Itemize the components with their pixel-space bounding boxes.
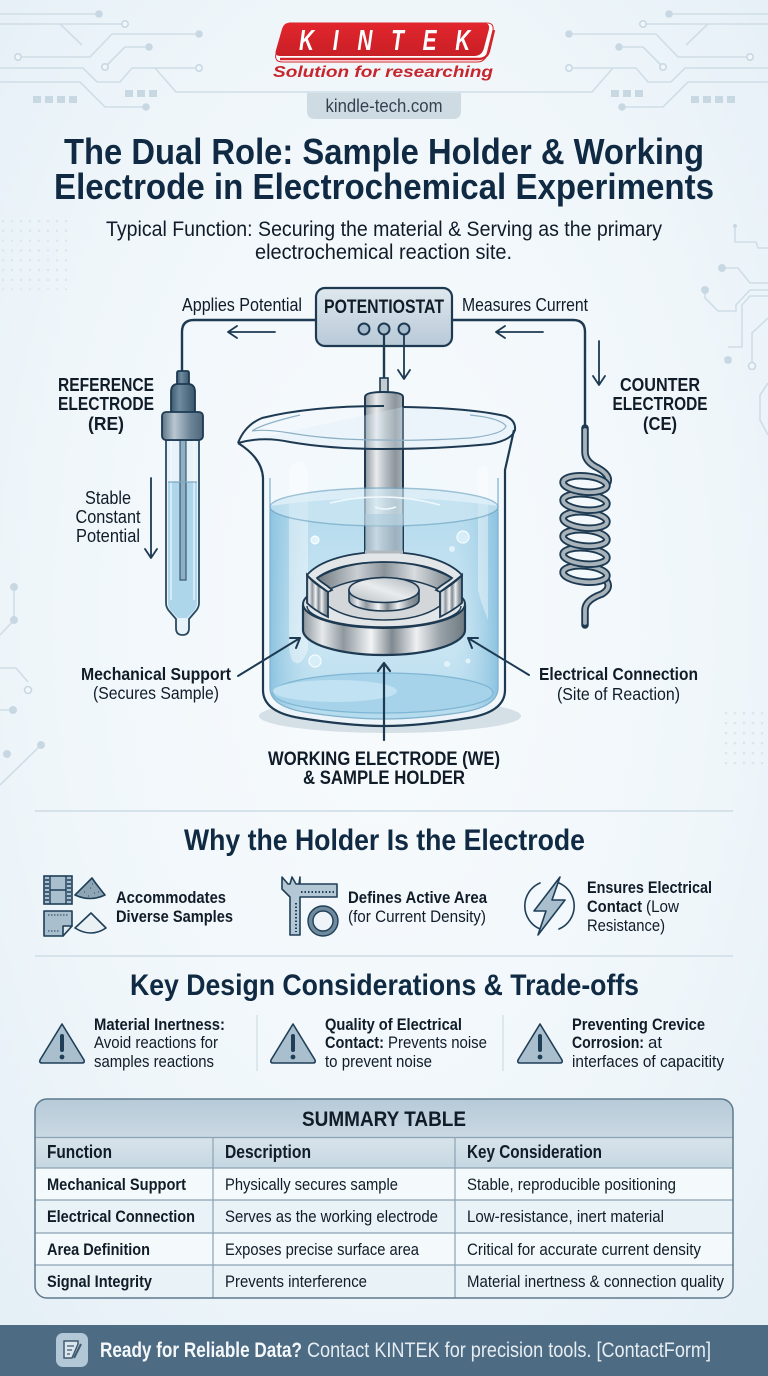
row: signal integrity: Material inertness & connection quality (467, 1272, 724, 1291)
icon: warning 2 (271, 1024, 315, 1063)
label: stable constant potential: Stable (85, 488, 131, 508)
icon: diverse samples (44, 876, 106, 936)
holder ring (307, 552, 462, 620)
website pill (307, 93, 461, 119)
text: ensures electrical contact: Resistance) (587, 917, 665, 935)
website pill: kindle-tech.com (326, 96, 442, 116)
footer banner (0, 1325, 768, 1376)
summary table (35, 1099, 733, 1298)
wire: working electrode (383, 335, 385, 378)
row: signal integrity: Prevents interference (225, 1272, 367, 1291)
label: reference electrode: ELECTRODE (58, 394, 154, 414)
call to action text: Ready for Reliable Data? (100, 1339, 302, 1362)
text: ensures electrical contact (587, 879, 712, 935)
row: mechanical support: Stable, reproducible positioning (467, 1175, 676, 1194)
icon: warning 3 (518, 1024, 562, 1063)
counter electrode coil (562, 428, 608, 625)
label: electrical connection: Electrical Connection (539, 664, 698, 684)
text: quality of electrical contact: Contact: (325, 1034, 384, 1052)
text: preventing crevice corrosion (572, 1016, 725, 1071)
label: electrical connection: (Site of Reaction) (557, 684, 680, 704)
subtitle: electrochemical reaction site. (255, 240, 512, 264)
title: Electrode in Electrochemical Experiments (54, 166, 714, 207)
icon: contact form (56, 1333, 88, 1367)
label: stable constant potential: Potential (76, 526, 140, 546)
row: signal integrity: Signal Integrity (47, 1272, 152, 1291)
label: working electrode: & SAMPLE HOLDER (303, 768, 465, 789)
logo: KINTEK (273, 23, 494, 81)
logo: KINTEK: Solution for researching (273, 64, 494, 81)
label: mechanical support (81, 664, 231, 703)
reference electrode (162, 371, 203, 635)
row: electrical connection (47, 1207, 664, 1226)
row: electrical connection: Serves as the working electrode (225, 1207, 438, 1226)
row: mechanical support: Mechanical Support (47, 1175, 186, 1194)
text: quality of electrical contact: Prevents noise (388, 1034, 487, 1052)
row: area definition: Area Definition (47, 1240, 150, 1259)
potentiostat box (316, 288, 452, 346)
text: accommodates diverse samples: Diverse Samples (116, 908, 233, 926)
label: mechanical support: Mechanical Support (81, 664, 231, 684)
row: electrical connection: Electrical Connection (47, 1207, 195, 1226)
heading: why the holder is the electrode: Why the Holder Is the Electrode (184, 824, 585, 857)
row: area definition: Critical for accurate current density (467, 1240, 701, 1259)
text: preventing crevice corrosion: Preventing Crevice (572, 1016, 705, 1034)
text: quality of electrical contact (325, 1016, 487, 1071)
label: counter electrode: ELECTRODE (612, 394, 708, 414)
label: counter electrode (612, 375, 708, 434)
row: area definition: Exposes precise surface area (225, 1240, 419, 1259)
row: electrical connection: Low-resistance, inert material (467, 1207, 664, 1226)
label: working electrode (268, 749, 500, 789)
label: counter electrode: (CE) (643, 414, 677, 434)
icon: lightning bolt (525, 877, 574, 935)
text: defines active area: Defines Active Area (348, 889, 488, 907)
heading: key design considerations: Key Design Considerations & Trade-offs (130, 969, 639, 1002)
potentiostat box: POTENTIOSTAT (324, 297, 444, 318)
arrow: mechanical support (238, 638, 300, 676)
text: material inertness: Avoid reactions for (94, 1034, 218, 1052)
text: ensures electrical contact: (Low (646, 898, 679, 916)
label: working electrode: WORKING ELECTRODE (WE) (268, 749, 500, 770)
text: defines active area: (for Current Density) (348, 908, 486, 926)
label: reference electrode (58, 375, 154, 434)
label: electrical connection (539, 664, 698, 704)
arrow: counter electrode direction (593, 341, 605, 385)
text: accommodates diverse samples: Accommodates (116, 889, 226, 907)
text: preventing crevice corrosion: interfaces of capacitity (572, 1053, 725, 1071)
beaker with solution and working electrode (238, 378, 521, 733)
row: area definition (47, 1240, 701, 1259)
sample disk (349, 578, 419, 611)
label: stable constant potential: Constant (76, 507, 140, 527)
subtitle: Typical Function: Securing the material & Serving as the primary (106, 217, 662, 241)
arrow: working electrode (378, 663, 390, 740)
title (54, 131, 714, 207)
text: preventing crevice corrosion: Corrosion: (572, 1034, 644, 1052)
arrow: stable potential (145, 478, 157, 558)
text: material inertness (94, 1016, 225, 1071)
table header row: Function (47, 1142, 112, 1162)
table header row: Key Consideration (467, 1142, 602, 1162)
label: reference electrode: (RE) (88, 414, 124, 434)
call to action text: Contact KINTEK for precision tools. [ContactForm] (307, 1339, 711, 1362)
icon: warning 1 (40, 1024, 84, 1063)
row: mechanical support (47, 1175, 676, 1194)
label: counter electrode: COUNTER (620, 375, 700, 395)
wire: measures current (452, 320, 585, 428)
arrow: working electrode direction (398, 335, 410, 379)
text: ensures electrical contact: Contact (587, 898, 642, 916)
arrow: current direction (496, 326, 543, 338)
text: quality of electrical contact: to prevent noise (325, 1053, 432, 1071)
subtitle (106, 217, 662, 264)
arrow: potential direction (228, 326, 275, 338)
wire: applies potential (182, 320, 316, 372)
label: reference electrode: REFERENCE (58, 375, 154, 395)
row: mechanical support: Physically secures sample (225, 1175, 398, 1194)
title: The Dual Role: Sample Holder & Working (64, 131, 704, 172)
label: measures current: Measures Current (462, 294, 588, 315)
text: material inertness: samples reactions (94, 1053, 214, 1071)
text: ensures electrical contact: Ensures Electrical (587, 879, 712, 897)
text: defines active area (348, 889, 488, 926)
text: preventing crevice corrosion: at (648, 1034, 662, 1052)
icon: caliper and ring (282, 877, 338, 936)
text: quality of electrical contact: Quality of Electrical (325, 1016, 462, 1034)
label: applies potential: Applies Potential (182, 294, 302, 315)
text: material inertness: Material Inertness: (94, 1016, 225, 1034)
table header row: Description (225, 1142, 311, 1162)
table title: SUMMARY TABLE (302, 1108, 466, 1131)
table header row (47, 1142, 602, 1162)
row: signal integrity (47, 1272, 724, 1291)
holder base (303, 580, 465, 655)
label: mechanical support: (Secures Sample) (93, 683, 219, 703)
text: accommodates diverse samples (116, 889, 233, 926)
arrow: electrical connection (468, 638, 529, 675)
logo: KINTEK: KINTEK (299, 25, 472, 57)
label: stable constant potential (76, 488, 140, 546)
